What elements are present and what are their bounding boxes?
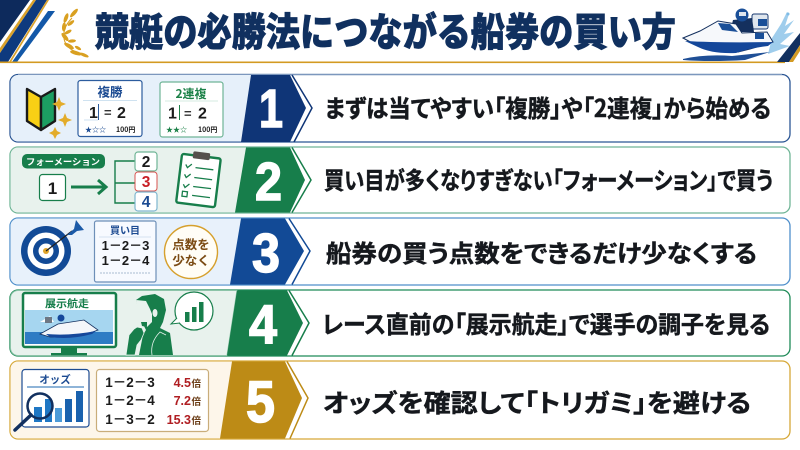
step text 5: オッズを確認して「トリガミ」を避ける: [323, 384, 751, 420]
card: odds table: 1－2－3: [105, 375, 155, 390]
card: 2連複: [160, 82, 223, 137]
panel 4: [10, 290, 790, 356]
icon: racing boat: [683, 8, 794, 61]
panel 2: [10, 147, 790, 213]
number badge 5: 5: [246, 370, 275, 435]
card: 買い目: 1－2－3: [102, 238, 149, 253]
number badge 4: 4: [249, 293, 277, 355]
number badge 4: [227, 290, 309, 356]
card: odds table: 倍: [192, 413, 202, 427]
card: 複勝: =: [104, 105, 112, 120]
panel 5: [10, 361, 790, 439]
card: odds table: 1－2－4: [105, 393, 155, 408]
icon: laurel: [60, 8, 89, 58]
card: 買い目: 1－2－4: [102, 253, 150, 268]
card: 複勝: 2: [117, 105, 126, 122]
card: odds table: 7.2: [174, 394, 191, 408]
icon: beginner mark: [27, 89, 55, 130]
card: 複勝: 100円: [116, 125, 135, 135]
number badge 3: 3: [252, 222, 280, 284]
icon: clipboard: [176, 150, 221, 207]
boxes 2 3 4: 2: [142, 154, 150, 171]
card: 2連複: 100円: [198, 125, 217, 135]
number badge 5: [220, 362, 308, 438]
number badge 3: [230, 218, 310, 284]
card: odds table: 15.3: [167, 413, 191, 427]
number badge 1: [241, 75, 312, 142]
icon: speech bubble with bars: [171, 292, 213, 330]
card: 2連複: 1: [168, 106, 177, 122]
panel 1: [10, 74, 790, 142]
card: 2連複: =: [184, 106, 192, 121]
card: odds chart: [15, 370, 89, 430]
icon: thinking person: [126, 294, 173, 355]
card: 2連複: ★★☆: [166, 125, 187, 135]
card: 複勝: 1: [89, 105, 98, 122]
icon: monitor: [23, 293, 116, 356]
card: odds table: 1－3－2: [105, 412, 155, 427]
box: 1: 1: [48, 179, 57, 198]
icon: monitor: 展示航走: [45, 296, 90, 311]
step text 3: 船券の買う点数をできるだけ少なくする: [326, 234, 757, 269]
bracket lines: [115, 161, 135, 203]
panel 3: [10, 218, 790, 285]
boxes 2 3 4: 4: [142, 194, 151, 211]
card: 買い目: 買い目: [110, 222, 140, 237]
boxes 2 3 4: 3: [142, 174, 151, 191]
card: odds table: 倍: [192, 376, 202, 390]
card: odds table: 倍: [192, 394, 202, 408]
badge: 点数を少なく: 少なく: [172, 250, 210, 269]
box: 1: [40, 174, 66, 200]
number badge 2: [235, 148, 311, 212]
card: odds table: [96, 370, 208, 432]
badge: 点数を少なく: 点数を: [172, 234, 210, 253]
card: 複勝: [78, 80, 142, 136]
icon: sparkles: [49, 97, 72, 139]
card: 買い目: [94, 221, 156, 282]
step text 1: まずは当てやすい「複勝」や「2連複」から始める: [325, 89, 771, 124]
card: odds table: 4.5: [174, 376, 191, 390]
badge: 点数を少なく: [164, 226, 218, 278]
number badge 2: 2: [255, 152, 282, 212]
card: 2連複: 2: [198, 106, 207, 122]
card: odds chart: オッズ: [39, 372, 71, 387]
arrow: [71, 180, 106, 194]
card: 2連複: 2連複: [175, 85, 207, 102]
boxes 2 3 4: [135, 152, 157, 211]
step text 4: レース直前の「展示航走」で選手の調子を見る: [322, 305, 770, 340]
card: 複勝: 複勝: [97, 82, 123, 100]
title: 競艇の必勝法につながる船券の買い方: [95, 2, 676, 58]
label: フォーメーション: フォーメーション: [26, 155, 100, 168]
icon: target: [21, 220, 84, 276]
number badge 1: 1: [259, 79, 283, 139]
header band: [0, 0, 800, 63]
card: 複勝: ★☆☆: [85, 125, 106, 135]
